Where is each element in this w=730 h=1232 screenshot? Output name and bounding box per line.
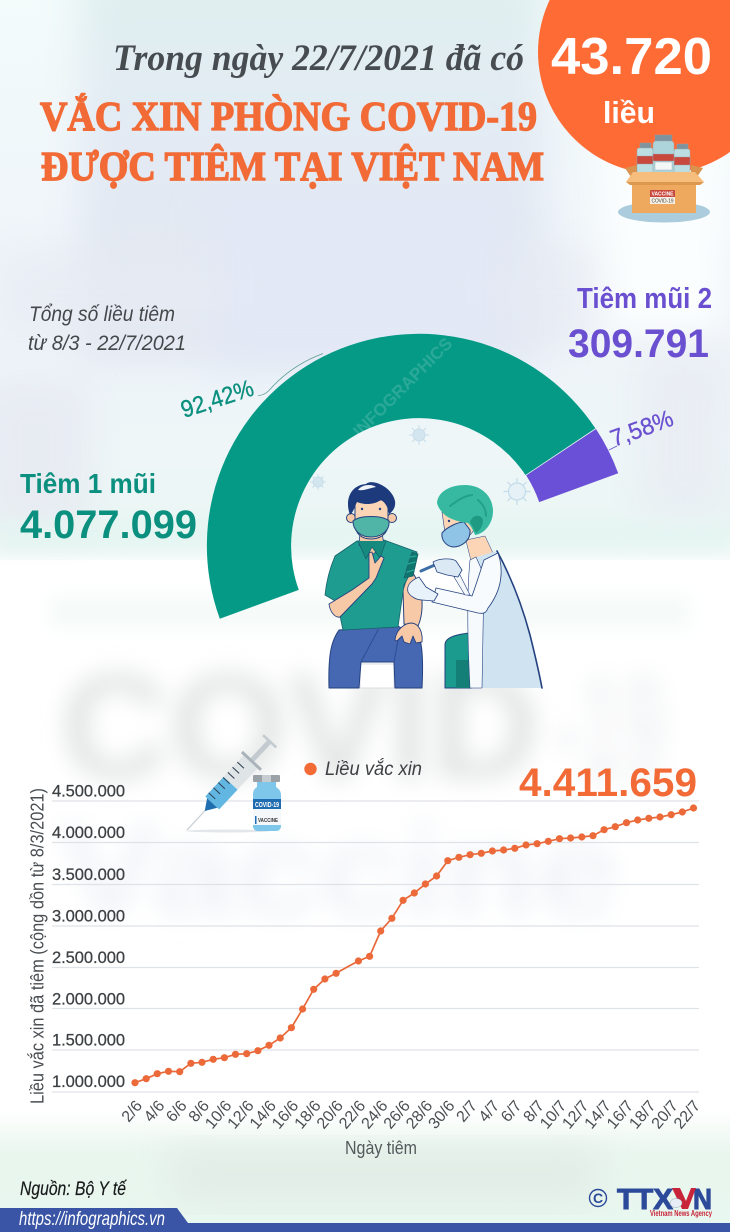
label: 7,58% with leader: 7,58%: [607, 405, 677, 453]
label: 92,42% with leader: 92,42%: [178, 375, 257, 424]
stat: second dose: Tiêm mũi 2: [577, 283, 712, 315]
figure: patient: [325, 482, 423, 688]
logo: TTXVN: [590, 1184, 712, 1218]
x axis date labels: 14/7: [582, 1098, 615, 1132]
y axis labels: 3.500.000: [52, 866, 125, 884]
text block: total doses period: Tổng số liều tiêm: [29, 303, 175, 326]
x axis date labels: 6/6: [163, 1098, 191, 1126]
icon: vaccine box: COVID-19: [652, 199, 674, 205]
y axis labels: [52, 782, 125, 1091]
icon: vaccine box: [618, 135, 710, 222]
x axis date labels: 26/6: [381, 1098, 414, 1132]
y axis labels: 1.000.000: [52, 1073, 125, 1091]
text block: total doses period: [28, 303, 186, 355]
icon: vaccine box: VACCINE: [652, 192, 674, 198]
watermark on chart: INFOGRAPHICS: [349, 334, 456, 441]
y axis labels: 1.500.000: [52, 1032, 125, 1050]
y axis labels: 3.000.000: [52, 908, 125, 926]
callout: cumulative total: 4.411.659: [519, 761, 697, 805]
x axis date labels: 10/6: [202, 1098, 235, 1132]
x axis date labels: 22/7: [671, 1098, 704, 1132]
legend: vaccine doses: Liều vắc xin: [325, 759, 422, 780]
x axis date labels: 14/6: [247, 1098, 280, 1132]
figure: nurse: [408, 485, 542, 688]
footer bar with URL tab: https://infographics.vn: [19, 1209, 165, 1230]
y axis title: Liều vắc xin đã tiêm (cộng dồn từ 8/3/2021): [26, 788, 48, 1104]
illustration: patient and nurse: [325, 482, 542, 688]
title line 1: VẮC XIN PHÒNG COVID-19: [40, 93, 537, 139]
text block: total doses period: từ 8/3 - 22/7/2021: [28, 332, 186, 355]
stat: first dose: [20, 468, 197, 547]
icon: vaccine vial: COVID-19: [255, 800, 279, 809]
daily dose number: 43.720: [551, 28, 712, 86]
x axis date labels: 16/6: [269, 1098, 302, 1132]
x axis date labels: 24/6: [359, 1098, 392, 1132]
x axis date labels: 18/6: [292, 1098, 325, 1132]
footer bar with URL tab: [0, 1208, 730, 1232]
label: 92,42% with leader: [178, 354, 323, 424]
x axis date labels: 28/6: [403, 1098, 436, 1132]
line chart: cumulative doses: [131, 804, 697, 1086]
icon: virus right: [504, 478, 530, 505]
x axis date labels: 10/7: [537, 1098, 570, 1132]
y axis labels: 2.000.000: [52, 990, 125, 1008]
y axis labels: 4.000.000: [52, 824, 125, 842]
orange circle callout: [538, 0, 730, 174]
segment: first dose 92.42%: [207, 334, 595, 619]
icon: virus top: [409, 425, 429, 445]
x axis date labels: 20/6: [314, 1098, 347, 1132]
source note: Nguồn: Bộ Y tế: [20, 1179, 127, 1200]
logo: TTXVN: N: [693, 1184, 712, 1216]
x axis date labels: 16/7: [604, 1098, 637, 1132]
chart grid lines: [52, 801, 699, 1092]
x axis date labels: 18/7: [626, 1098, 660, 1132]
segment: second dose 7.58%: [526, 429, 618, 502]
x axis date labels: 30/6: [426, 1098, 459, 1132]
icon: vaccine vial: [253, 775, 281, 831]
stat: first dose: 4.077.099: [20, 503, 197, 547]
x axis date labels: 12/7: [559, 1098, 593, 1132]
x axis date labels: 4/6: [141, 1098, 168, 1126]
x axis date labels: 8/6: [186, 1098, 213, 1126]
x axis date labels: [119, 1098, 704, 1132]
unit: liều: liều: [603, 95, 655, 130]
x axis date labels: 4/7: [476, 1098, 503, 1126]
stat: second dose: 309.791: [568, 322, 709, 366]
x axis date labels: 6/7: [498, 1098, 526, 1126]
blurred photographic background: COVID: [60, 642, 540, 810]
stat: first dose: Tiêm 1 mũi: [20, 468, 156, 499]
x axis date labels: 8/7: [521, 1098, 548, 1126]
x axis date labels: 2/6: [119, 1098, 146, 1126]
logo: TTXVN: C: [593, 1190, 603, 1206]
x axis date labels: 12/6: [225, 1098, 258, 1132]
logo: TTXVN: TTX: [617, 1184, 674, 1216]
x axis date labels: 22/6: [336, 1098, 369, 1132]
title line 2: ĐƯỢC TIÊM TẠI VIỆT NAM: [41, 143, 544, 189]
x axis title: Ngày tiêm: [345, 1138, 417, 1158]
x axis date labels: 20/7: [649, 1098, 682, 1132]
heading: date line: Trong ngày 22/7/2021 đã có: [113, 38, 524, 79]
stat: second dose: [568, 283, 712, 366]
y axis labels: 2.500.000: [52, 949, 125, 967]
x axis date labels: 2/7: [454, 1098, 481, 1126]
icon: virus left: [310, 474, 326, 490]
icon: vaccine vial: VACCINE: [258, 818, 278, 824]
semi-donut chart: [207, 334, 618, 619]
blurred photographic background: Vaccine: [60, 797, 620, 943]
icon: syringe: [177, 732, 280, 839]
y axis labels: 4.500.000: [52, 782, 125, 800]
